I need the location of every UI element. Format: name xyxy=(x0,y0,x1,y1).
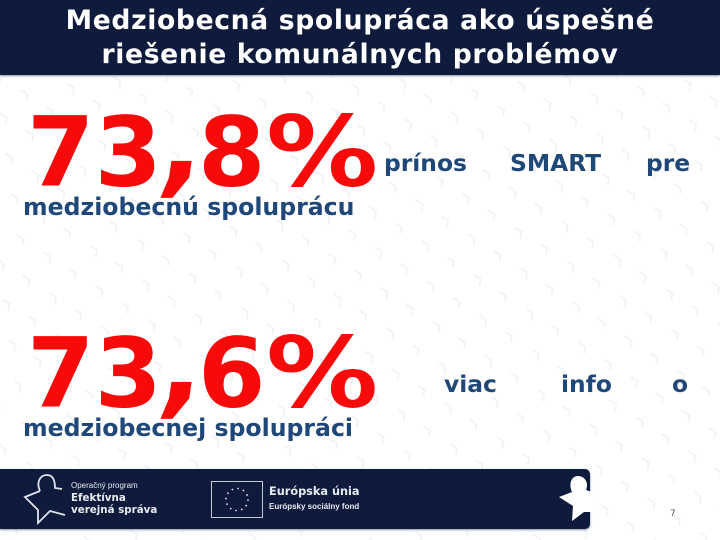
text: second statement right part: o xyxy=(672,370,688,398)
page number: 7 xyxy=(670,509,676,519)
text: first statement right part: pre xyxy=(646,149,690,177)
icon: EU flag xyxy=(211,481,263,518)
text: European Union: Európsky sociálny fond xyxy=(269,502,359,511)
text: second statement right part xyxy=(444,370,688,398)
text: operational programme: Operačný program xyxy=(71,481,138,490)
statistic: 73,6%: % xyxy=(266,315,378,430)
title banner xyxy=(0,0,720,75)
text: European Union: Európska únia xyxy=(269,485,360,498)
text: first statement second line: medziobecnú spoluprácu xyxy=(23,193,354,221)
text: operational programme: Efektívna xyxy=(71,492,126,504)
statistic: 73,8% xyxy=(27,78,378,209)
title: Medziobecná spolupráca ako úspešné xyxy=(66,5,654,36)
text: European Union xyxy=(269,485,360,511)
text: first statement right part xyxy=(384,149,690,177)
footer banner xyxy=(0,469,590,529)
icon: white star figure xyxy=(559,476,592,521)
statistic: 73,6%: , xyxy=(153,299,215,430)
icon: star figure logo xyxy=(24,474,66,525)
statistic: 73,8%: 73 xyxy=(27,96,162,209)
statistic: 73,6%: 6 xyxy=(198,317,266,430)
text: operational programme xyxy=(71,481,157,516)
text: second statement second line: medziobecnej spolupráci xyxy=(23,414,353,442)
text: second statement right part: viac xyxy=(444,370,497,398)
statistic: 73,6%: 73 xyxy=(27,317,162,430)
title xyxy=(66,5,654,70)
text: second statement right part: info xyxy=(561,370,612,398)
text: first statement right part: prínos xyxy=(384,149,467,177)
statistic: 73,8%: % xyxy=(266,94,378,209)
statistic: 73,6% xyxy=(27,299,378,430)
statistic: 73,8%: 8 xyxy=(198,96,266,209)
title: riešenie komunálnych problémov xyxy=(101,39,618,70)
text: operational programme: verejná správa xyxy=(71,504,157,516)
statistic: 73,8%: , xyxy=(153,78,215,209)
text: first statement right part: SMART xyxy=(510,149,601,177)
